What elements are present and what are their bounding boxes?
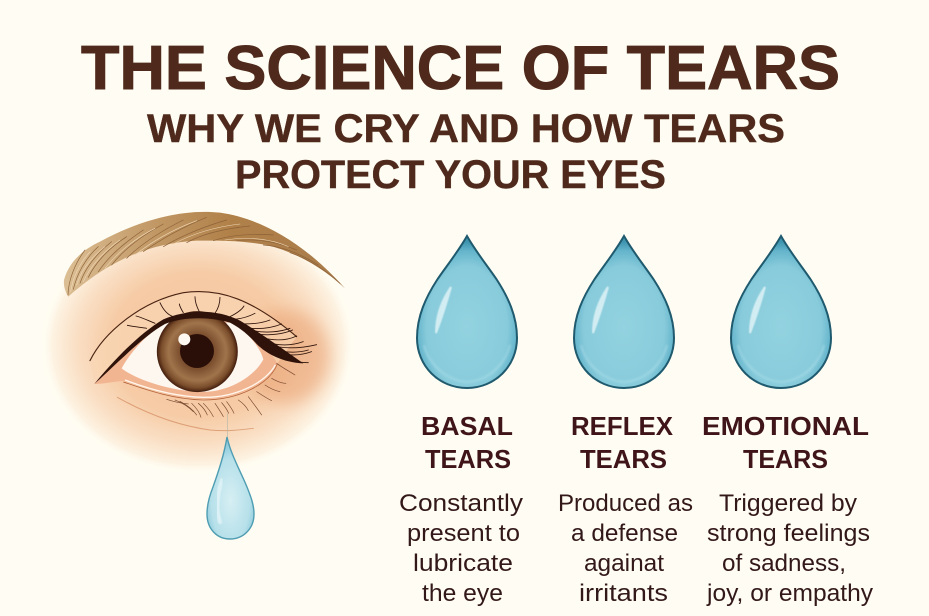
column: basal tears <box>399 411 523 607</box>
pupil <box>180 334 214 368</box>
heading: emotional tears: EMOTIONAL <box>702 411 869 441</box>
heading: basal tears: TEARS <box>425 444 511 474</box>
description: emotional tears: strong feelings <box>707 520 870 547</box>
small tear drop <box>207 437 254 539</box>
darker shading beside the eye <box>243 310 330 403</box>
tear trail <box>226 413 228 437</box>
eye highlight <box>178 333 190 345</box>
description: basal tears <box>399 490 523 607</box>
description: reflex tears: Produced as <box>558 490 693 517</box>
title: THE SCIENCE OF TEARS <box>81 34 840 103</box>
description: emotional tears: joy, or empathy <box>706 580 873 607</box>
tear drop: basal <box>417 236 517 388</box>
subtitle: WHY WE CRY AND HOW TEARS <box>147 107 785 151</box>
lower lid rim <box>94 314 277 399</box>
description: emotional tears: Triggered by <box>719 490 857 517</box>
heading: reflex tears: TEARS <box>580 444 667 474</box>
skin shading around the eye <box>40 215 356 475</box>
subtitle <box>147 107 785 197</box>
upper lash line <box>94 312 303 384</box>
eye crease <box>90 291 297 361</box>
lower lashes <box>167 363 295 417</box>
column: emotional tears <box>702 411 873 607</box>
illustration: crying eye <box>40 212 356 539</box>
heading: basal tears: BASAL <box>421 411 513 441</box>
upper eyelid <box>90 291 297 383</box>
column: reflex tears <box>558 411 693 607</box>
description: reflex tears: irritants <box>579 580 668 607</box>
heading: emotional tears <box>702 411 869 474</box>
subtitle: PROTECT YOUR EYES <box>235 153 666 197</box>
description: basal tears: the eye <box>422 580 503 607</box>
heading: emotional tears: TEARS <box>743 444 828 474</box>
sclera <box>122 323 263 392</box>
heading: reflex tears <box>571 411 674 474</box>
iris <box>157 312 237 392</box>
description: reflex tears <box>558 490 693 607</box>
under-eye crease <box>117 397 253 431</box>
description: basal tears: Constantly <box>399 490 523 517</box>
description: reflex tears: againat <box>584 550 664 577</box>
heading: basal tears <box>421 411 513 474</box>
description: basal tears: present to <box>407 520 520 547</box>
description: emotional tears: of sadness, <box>722 550 846 577</box>
eyebrow <box>64 212 345 297</box>
upper lashes <box>127 297 317 363</box>
heading: reflex tears: REFLEX <box>571 411 674 441</box>
tear drop: emotional <box>731 236 831 388</box>
tear drop: reflex <box>574 236 674 388</box>
description: emotional tears <box>706 490 873 607</box>
description: basal tears: lubricate <box>413 550 513 577</box>
description: reflex tears: a defense <box>571 520 678 547</box>
